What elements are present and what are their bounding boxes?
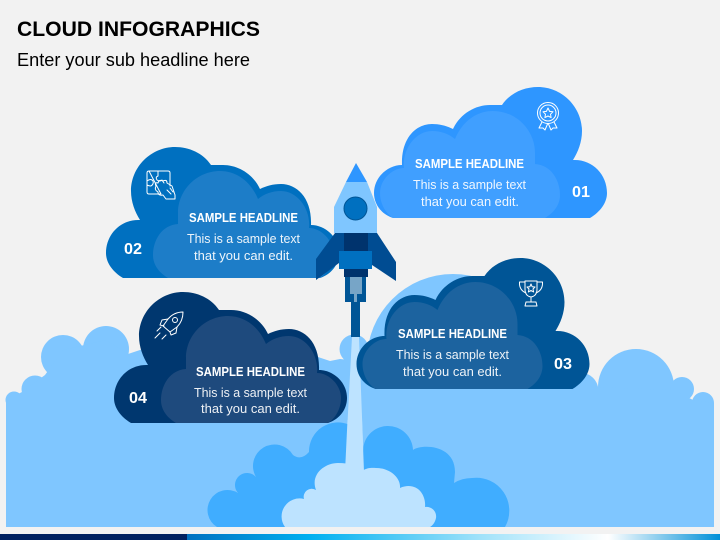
rocket body: [334, 182, 377, 233]
cloud 03 headline: SAMPLE HEADLINE: [398, 327, 507, 341]
cloud 02 headline: SAMPLE HEADLINE: [189, 211, 298, 225]
cloud 03 number: 03: [554, 356, 572, 373]
rocket stem: [351, 300, 360, 337]
front pale smoke cloud: [282, 463, 436, 527]
cloud 04 body text: [194, 386, 308, 416]
cloud 04 shape: [114, 292, 347, 423]
cloud 02: [106, 147, 339, 278]
cloud 02 body text: [187, 232, 301, 263]
rocket midsection: [344, 233, 368, 277]
rocket nose: [346, 163, 367, 182]
cloud 03 shape: [356, 258, 590, 389]
cloud 04 headline: SAMPLE HEADLINE: [196, 365, 305, 379]
cloud 02 body text: that you can edit.: [194, 249, 293, 263]
cloud 01 shape: [374, 87, 607, 218]
cloud 03 body text: [396, 348, 510, 379]
cloud 01 number: 01: [572, 184, 590, 201]
icon: small rocket: [155, 312, 183, 339]
icon: puzzle: [147, 171, 175, 199]
cloud 01: [374, 87, 607, 218]
cloud 04 body text: This is a sample text: [194, 386, 308, 400]
blue smoke cloud: [208, 422, 509, 527]
cloud 02 body text: This is a sample text: [187, 232, 301, 246]
cloud 02 shape: [106, 147, 339, 278]
central rocket: [316, 163, 396, 337]
left fin: [316, 233, 345, 280]
cloud 01 body text: that you can edit.: [421, 195, 519, 209]
cloud 03 body text: This is a sample text: [396, 348, 510, 362]
icon: trophy: [519, 281, 543, 306]
cloud 03: [356, 258, 590, 389]
cloud 04: [114, 292, 347, 423]
cloud 01 body text: [413, 178, 527, 209]
rocket window: [344, 197, 367, 220]
cloud 04 body text: that you can edit.: [201, 402, 300, 416]
rocket band: [339, 251, 372, 269]
rocket exhaust trail: [345, 337, 364, 470]
cloud 01 headline: SAMPLE HEADLINE: [415, 157, 524, 171]
large background cloud: [6, 274, 714, 527]
footer bar: [0, 534, 720, 540]
cloud 01 body text: This is a sample text: [413, 178, 527, 192]
cloud 04 number: 04: [129, 390, 147, 407]
trail over smoke: [345, 420, 364, 472]
cloud 02 number: 02: [124, 241, 142, 258]
title: CLOUD INFOGRAPHICS: [17, 18, 260, 41]
subtitle: Enter your sub headline here: [17, 50, 250, 70]
cloud 03 body text: that you can edit.: [403, 365, 502, 379]
icon: medal: [538, 102, 558, 130]
right fin: [367, 233, 396, 281]
rocket engine: [345, 277, 366, 302]
